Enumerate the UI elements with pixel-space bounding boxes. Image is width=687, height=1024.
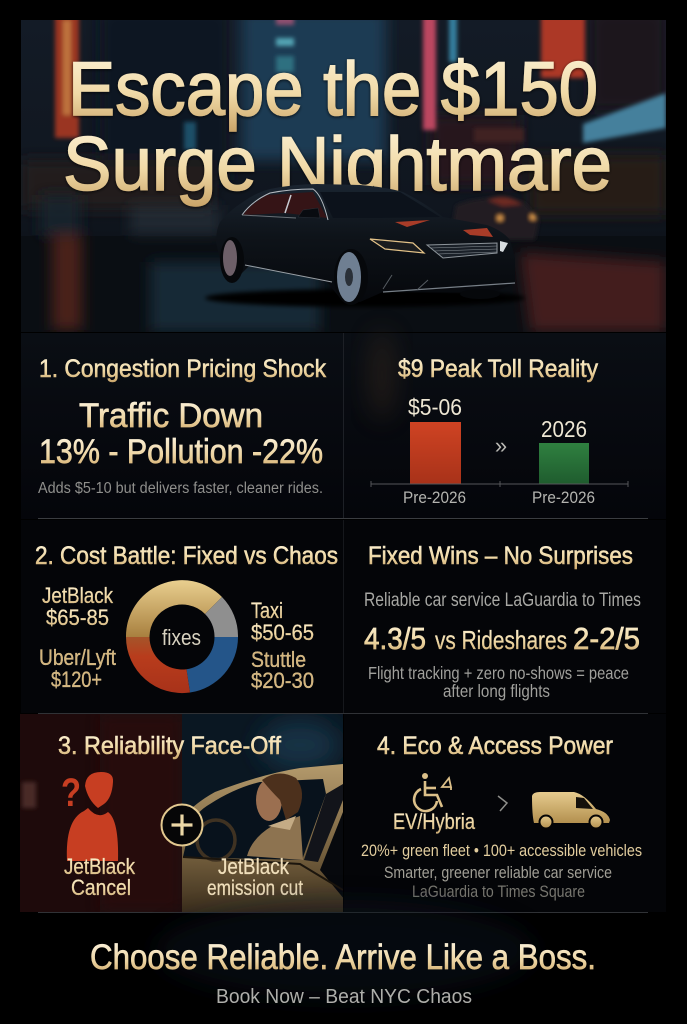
legend right: [251, 598, 314, 693]
big stat: [39, 397, 323, 471]
legend left: JetBlack: [42, 583, 114, 608]
title: Escape the $150: [68, 47, 598, 132]
flight tracking note: after long flights: [443, 681, 550, 701]
chart axis: [371, 481, 628, 507]
panel: peak toll bar chart: [371, 355, 628, 507]
label: jetblack emission cut: JetBlack: [218, 854, 290, 879]
rating comparison: 2-2/5: [573, 621, 640, 656]
heading: cost battle: 2. Cost Battle: Fixed vs Chaos: [35, 542, 338, 570]
label: jetblack emission cut: [207, 854, 303, 900]
rating comparison: [364, 621, 640, 656]
bar: pre-2026: [408, 394, 462, 484]
heading: reliability: 3. Reliability Face-Off: [58, 732, 281, 760]
legend left: Uber/Lyft: [39, 645, 116, 670]
icon: confused person: [61, 771, 118, 861]
panel: fixed wins: [364, 542, 641, 701]
flight tracking note: [368, 663, 629, 701]
legend right: Stuttle: [251, 647, 306, 672]
caption: Adds $5-10 but delivers faster, cleaner rides.: [38, 480, 323, 497]
eco note: Smarter, greener reliable car service: [384, 864, 612, 882]
big stat: 13% - Pollution -22%: [39, 433, 323, 471]
background car right: [451, 197, 539, 240]
road: [21, 236, 666, 332]
heading: eco access: 4. Eco & Access Power: [377, 732, 613, 760]
heading: congestion pricing: 1. Congestion Pricing Shock: [39, 355, 326, 383]
legend right: $20-30: [251, 668, 314, 693]
bar: pre-2026: $5-06: [408, 394, 462, 420]
legend left: [39, 583, 116, 692]
label: jetblack cancel: JetBlack: [64, 854, 136, 879]
legend left: $65-85: [46, 605, 109, 630]
label: jetblack cancel: Cancel: [71, 875, 131, 900]
eco note: LaGuardia to Times Square: [412, 883, 585, 901]
panel: eco and access power: [361, 732, 642, 901]
legend right: Taxi: [251, 598, 283, 623]
chart axis: Pre-2026: [532, 488, 595, 507]
rating comparison: vs Rideshares: [435, 625, 567, 655]
heading: peak toll: $9 Peak Toll Reality: [398, 355, 598, 383]
panel backgrounds: [21, 330, 666, 913]
cta subline: Book Now – Beat NYC Chaos: [216, 986, 472, 1008]
black sedan: [205, 184, 525, 307]
bar: 2026: 2026: [541, 416, 587, 442]
donut chart: [126, 580, 238, 693]
gold car with driver: [182, 764, 345, 912]
fleet stats: 20%+ green fleet • 100+ accessible vehicles: [361, 841, 642, 860]
label: jetblack emission cut: emission cut: [207, 877, 303, 900]
heading: fixed wins: Fixed Wins – No Surprises: [368, 542, 633, 570]
legend right: $50-65: [251, 620, 314, 645]
arrow: chevrons: »: [495, 433, 507, 458]
icon: wheelchair: [414, 773, 451, 811]
arrow: chevron: [498, 796, 507, 811]
legend left: $120+: [51, 667, 102, 692]
wheels: [220, 237, 244, 283]
hero: rainy city street with black sedan: [21, 10, 666, 332]
donut chart: fixes: [162, 625, 201, 650]
title: Surge Nightmare: [63, 122, 612, 207]
title: [63, 47, 612, 207]
icon: confused person: ?: [61, 771, 81, 815]
icon: van: [532, 792, 610, 828]
icon: plus badge: [162, 804, 202, 846]
big stat: Traffic Down: [79, 397, 263, 435]
panel: congestion pricing shock: [38, 355, 326, 497]
chart axis: Pre-2026: [403, 488, 466, 507]
eco note: [384, 864, 612, 901]
flight tracking note: Flight tracking + zero no-shows = peace: [368, 663, 629, 683]
label: jetblack cancel: [64, 854, 136, 900]
panel: reliability face-off: [20, 714, 345, 912]
panel: cost battle: [35, 542, 338, 693]
rating comparison: 4.3/5: [364, 621, 426, 656]
bar: 2026: [539, 416, 589, 484]
cta headline: Choose Reliable. Arrive Like a Boss.: [90, 938, 596, 977]
footer call to action: [90, 900, 596, 1008]
label: ev hybrid: EV/Hybria: [393, 809, 476, 834]
